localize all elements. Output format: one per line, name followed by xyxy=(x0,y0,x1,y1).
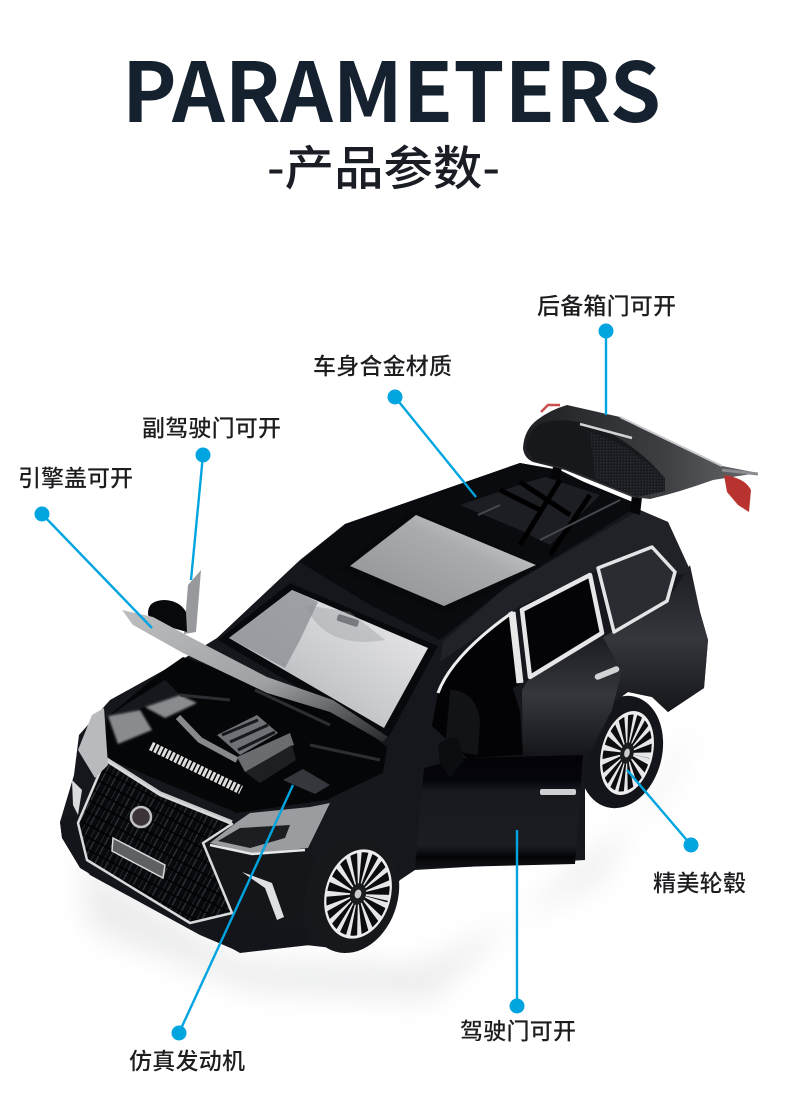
car body xyxy=(60,463,708,952)
rear door handle xyxy=(594,665,620,681)
rear wheel xyxy=(567,687,675,817)
callout: passenger door: 副驾驶门可开 xyxy=(142,409,281,443)
callout: driver door xyxy=(460,830,576,1046)
roof ribs xyxy=(460,477,600,545)
callout: hood: 引擎盖可开 xyxy=(18,459,133,493)
seat shadows xyxy=(445,690,480,755)
chrome grille frame top xyxy=(105,758,232,822)
windshield xyxy=(218,583,438,740)
open tailgate xyxy=(523,405,758,512)
fascia lower bumper xyxy=(205,803,330,950)
side mirror xyxy=(438,738,464,778)
tailgate struts xyxy=(550,460,642,515)
fender tops xyxy=(110,680,180,716)
subtitle: -产品参数- xyxy=(267,130,500,199)
car model illustration xyxy=(60,405,758,1000)
callout: rear door xyxy=(537,287,676,415)
front door opening xyxy=(432,612,523,758)
callout: wheel hub: 精美轮毂 xyxy=(653,864,746,898)
license plate xyxy=(112,838,165,878)
fog light trim xyxy=(242,872,284,920)
roof panel xyxy=(300,463,640,640)
callout: wheel hub xyxy=(627,770,746,898)
grille emblem xyxy=(131,807,151,827)
ground shadow xyxy=(80,720,700,1000)
engine bay xyxy=(103,657,387,813)
headlight xyxy=(210,803,330,854)
left bumper trim xyxy=(72,780,82,815)
rear view mirror xyxy=(336,614,359,627)
tail light xyxy=(724,475,751,512)
callout: alloy body: 车身合金材质 xyxy=(313,347,452,381)
left headlight xyxy=(78,708,108,778)
callout: engine xyxy=(129,785,293,1076)
callout: passenger door xyxy=(142,409,281,580)
passenger mirror xyxy=(148,600,187,632)
rear side window xyxy=(522,575,602,677)
sunroof glass xyxy=(338,510,542,614)
callout: engine: 仿真发动机 xyxy=(129,1042,245,1076)
engine details xyxy=(108,690,380,794)
open hood xyxy=(122,610,388,742)
rear fender xyxy=(598,565,708,712)
door handle xyxy=(540,789,576,795)
callout: alloy body xyxy=(313,347,476,497)
title: PARAMETERS xyxy=(122,27,661,146)
quarter window xyxy=(598,547,675,632)
passenger door xyxy=(184,570,201,634)
callout: rear door: 后备箱门可开 xyxy=(537,287,676,321)
rear door panel xyxy=(522,636,622,755)
roof side rail xyxy=(440,510,690,662)
callout: driver door: 驾驶门可开 xyxy=(460,1012,576,1046)
front wheel xyxy=(291,824,413,964)
front grille xyxy=(78,760,232,923)
callout: hood xyxy=(18,459,152,628)
open driver door xyxy=(415,738,583,868)
